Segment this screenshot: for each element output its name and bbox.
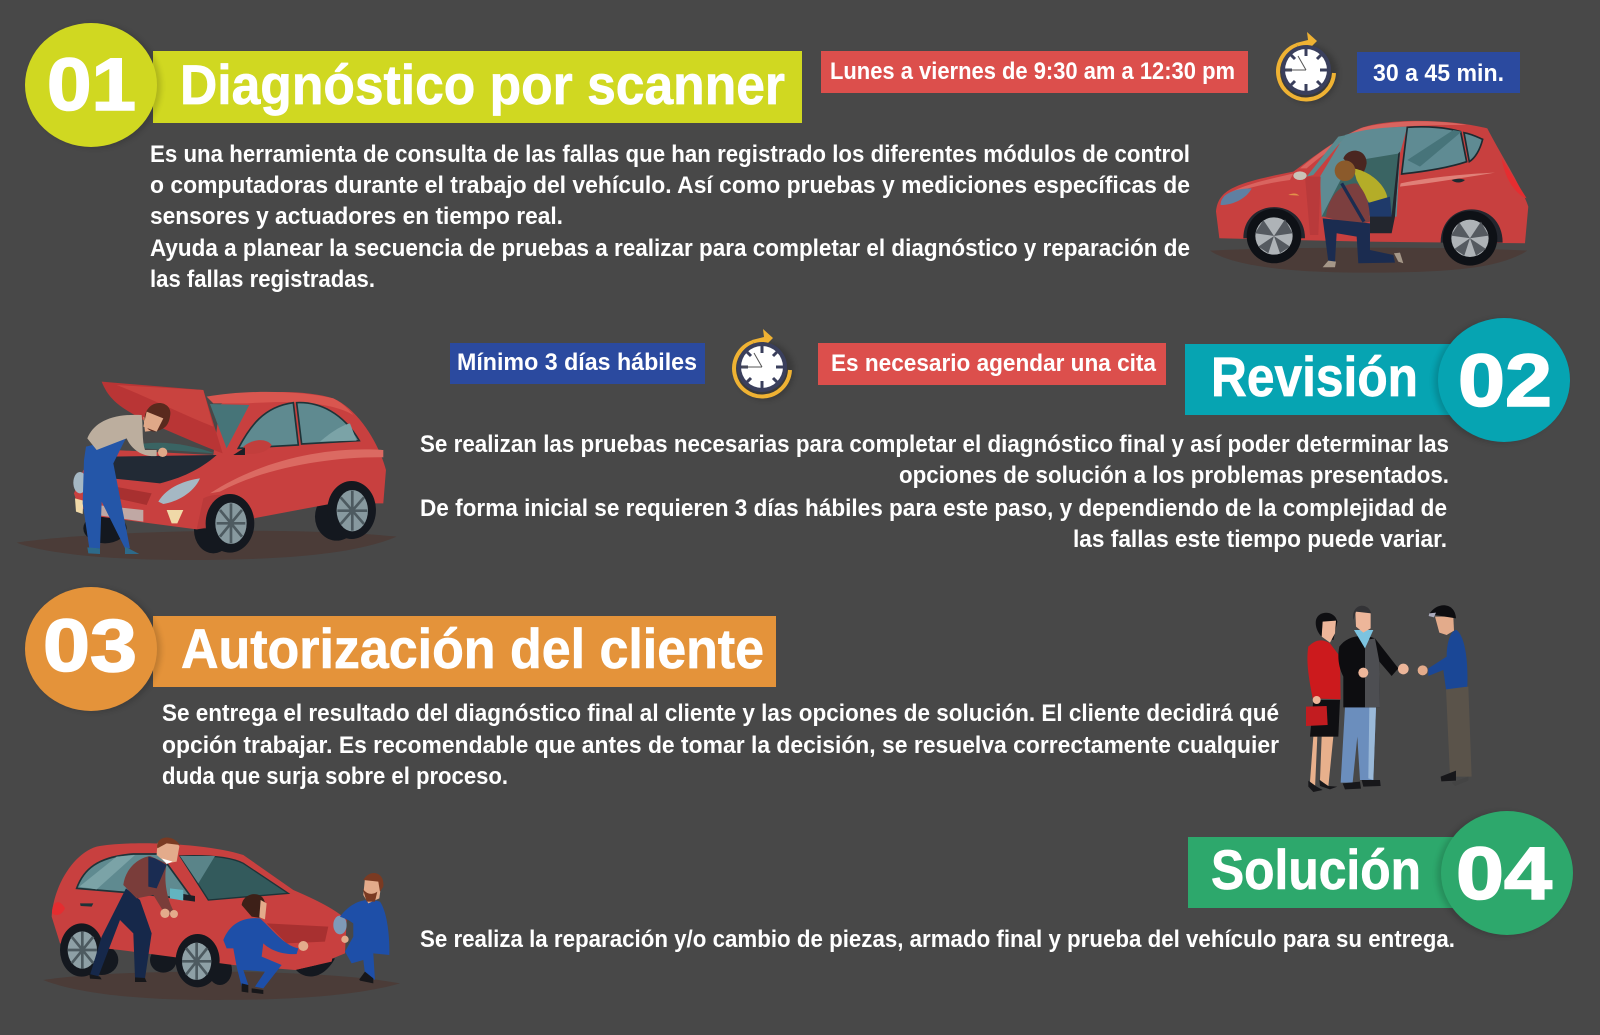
panel: step 04 solución	[43, 811, 1573, 1000]
illustration: couple shaking hands with mechanic	[1306, 605, 1472, 792]
heading: 01 Diagnóstico por scanner	[25, 23, 802, 148]
text block: descripción 01: las fallas registradas.	[150, 266, 375, 293]
illustration: mechanic checking engine of red car	[17, 382, 397, 560]
heading: 03 Autorización del cliente	[25, 587, 776, 712]
text block: descripción 03: Se entrega el resultado del diagnóstico final al cliente y las opciones de solución. El cliente decidirá qué	[162, 700, 1279, 727]
heading: Solución 04: Solución	[1211, 838, 1421, 901]
label: horario: Lunes a viernes de 9:30 am a 12:30 pm	[830, 58, 1235, 85]
label: agendar cita	[818, 343, 1166, 385]
text block: descripción 01: Es una herramienta de consulta de las fallas que han registrado los diferentes módulos de control	[150, 141, 1190, 168]
illustration: red car with open door and two people	[1210, 121, 1528, 273]
text block: descripción 02: las fallas este tiempo puede variar.	[1073, 526, 1447, 553]
panel: step 03 autorización del cliente	[25, 587, 1472, 792]
text block: descripción 02: Se realizan las pruebas necesarias para completar el diagnóstico final y así poder determinar las	[420, 431, 1449, 458]
text block: descripción 01	[150, 141, 1190, 293]
panel: step 02 revisión	[17, 318, 1570, 560]
man in black coat	[1338, 606, 1409, 789]
text block: descripción 03: duda que surja sobre el proceso.	[162, 763, 508, 790]
heading: Solución 04: 04	[1456, 832, 1552, 915]
mechanic in blue sweater	[1418, 605, 1472, 786]
woman	[1306, 613, 1341, 792]
text block: descripción 04: Se realiza la reparación y/o cambio de piezas, armado final y prueba del vehículo para su entrega.	[420, 926, 1455, 953]
text block: descripción 02	[420, 431, 1449, 553]
text block: descripción 01: Ayuda a planear la secuencia de pruebas a realizar para completar el diagnóstico y reparación de	[150, 235, 1190, 262]
label: agendar cita: Es necesario agendar una cita	[831, 350, 1156, 377]
heading: 01 Diagnóstico por scanner: Diagnóstico por scanner	[180, 53, 785, 116]
text block: descripción 02: opciones de solución a los problemas presentados.	[899, 462, 1449, 489]
label: tiempo mínimo: Mínimo 3 días hábiles	[457, 349, 697, 376]
text block: descripción 02: De forma inicial se requieren 3 días hábiles para este paso, y dependiendo de la complejidad de	[420, 495, 1447, 522]
heading: 01 Diagnóstico por scanner: 01	[47, 43, 136, 126]
heading: Revisión 02	[1185, 318, 1570, 443]
label: horario	[821, 51, 1248, 93]
text block: descripción 03	[162, 700, 1279, 790]
illustration: three mechanics repairing red car	[43, 837, 400, 1000]
heading: Revisión 02: 02	[1458, 339, 1552, 422]
heading: 03 Autorización del cliente: 03	[43, 604, 137, 687]
text block: descripción 01: o computadoras durante el trabajo del vehículo. Así como pruebas y mediciones específicas de	[150, 172, 1190, 199]
text block: descripción 01: sensores y actuadores en tiempo real.	[150, 203, 563, 230]
heading: 03 Autorización del cliente: Autorización del cliente	[181, 617, 764, 680]
icon: clock	[1278, 32, 1338, 103]
label: tiempo mínimo	[450, 343, 705, 384]
label: duración	[1357, 52, 1520, 93]
icon: clock	[734, 329, 794, 400]
panel: step 01 diagnóstico por scanner	[25, 23, 1528, 293]
heading: Solución 04	[1188, 811, 1573, 936]
text block: descripción 03: opción trabajar. Es recomendable que antes de tomar la decisión, se resuelva correctamente cualquier	[162, 732, 1279, 759]
label: duración: 30 a 45 min.	[1373, 60, 1504, 87]
heading: Revisión 02: Revisión	[1211, 345, 1418, 408]
